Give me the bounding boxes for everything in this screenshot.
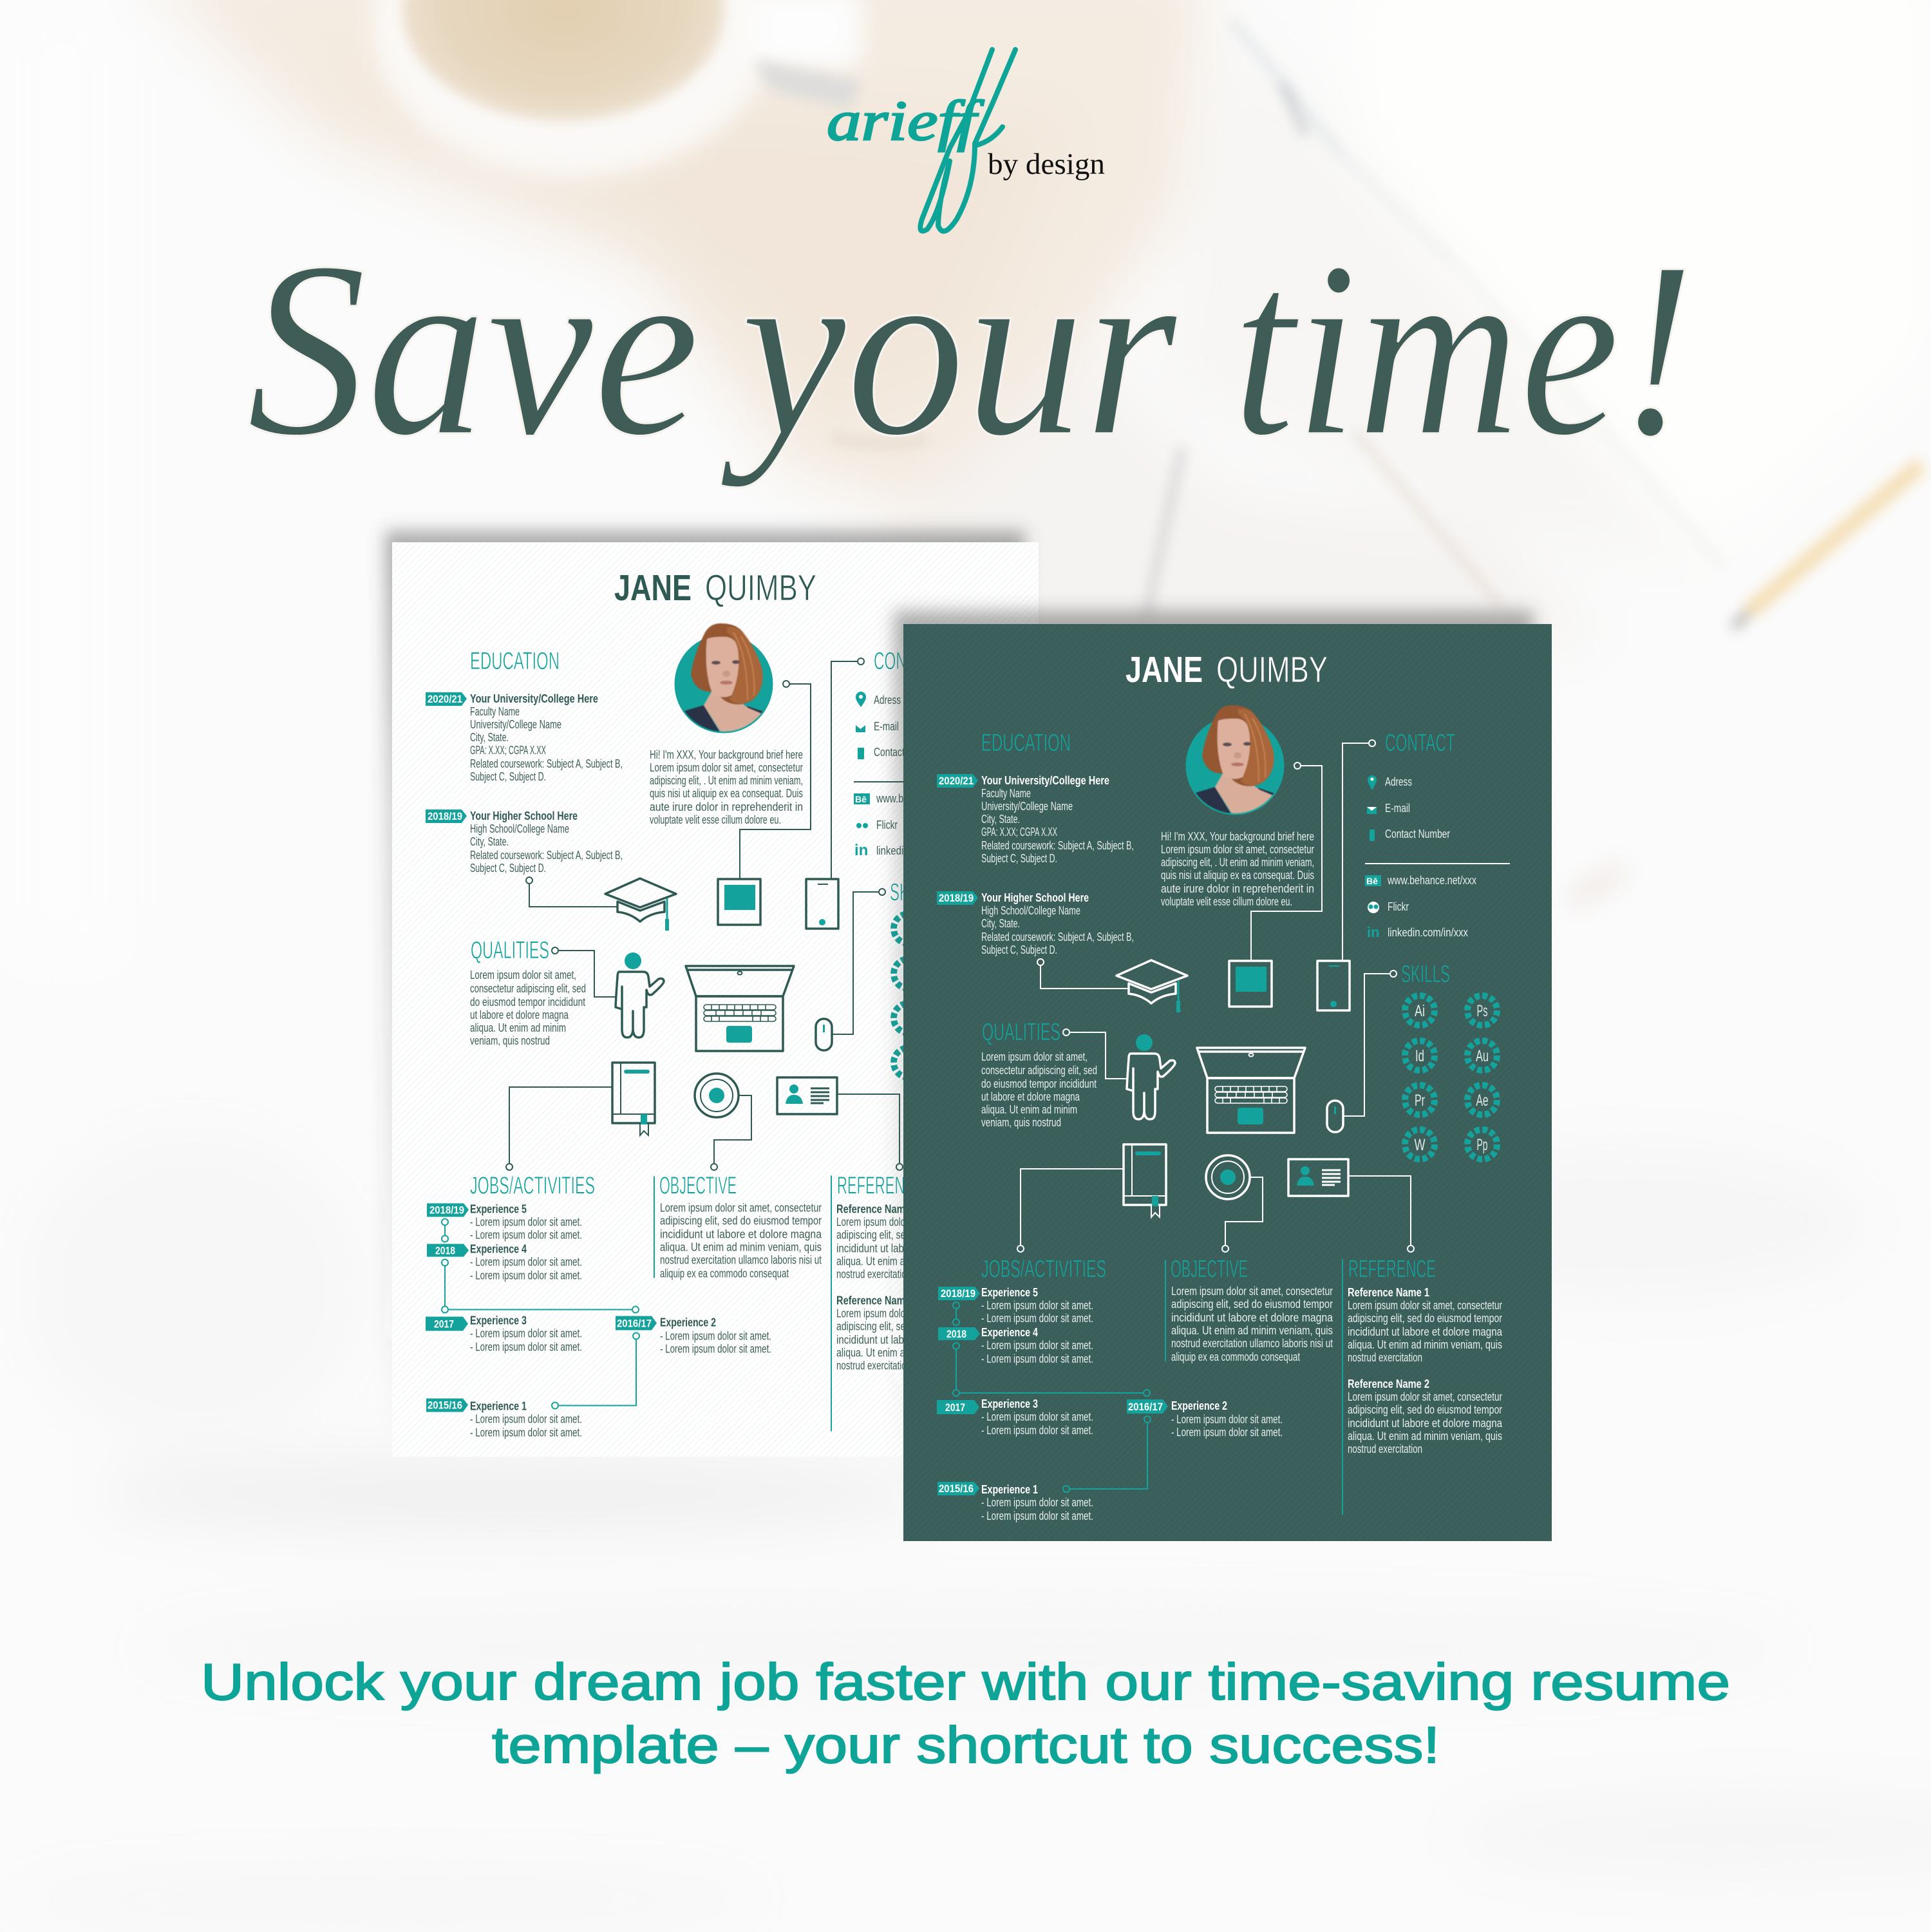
reference section: incididunt ut labore et dolore magna	[836, 1333, 992, 1346]
skills section: Ps	[1477, 1002, 1487, 1020]
logo script wordmark: arieff	[827, 90, 984, 153]
reference section: Reference Name 2	[836, 1294, 918, 1307]
objective section: Lorem ipsum dolor sit amet, consectetur	[1171, 1285, 1333, 1298]
contact section: CONTACT	[1385, 730, 1455, 757]
icon: id card	[1288, 1159, 1414, 1252]
jobs and activities timeline: - Lorem ipsum dolor sit amet.	[470, 1269, 582, 1282]
reference section: REFERENCE	[837, 1172, 925, 1199]
icon: tablet	[1229, 961, 1272, 1007]
jobs and activities timeline: Experience 2	[660, 1316, 716, 1329]
contact section: Flickr	[1388, 900, 1409, 913]
qualities section: QUALITIES	[982, 1019, 1060, 1046]
education section	[937, 730, 1134, 956]
qualities section: aliqua. Ut enim ad minim	[981, 1103, 1077, 1116]
name heading: JANE	[1126, 649, 1203, 690]
reference section: nostrud exercitation	[836, 1359, 911, 1372]
jobs and activities timeline: - Lorem ipsum dolor sit amet.	[981, 1352, 1093, 1365]
jobs and activities timeline: Experience 5	[981, 1286, 1038, 1299]
tagline caption	[201, 1653, 1730, 1774]
objective section: OBJECTIVE	[659, 1172, 737, 1199]
bio text: aute irure dolor in reprehenderit in	[1161, 882, 1314, 895]
education section: 2018/19	[428, 810, 462, 822]
reference section: incididunt ut labore et dolore magna	[1348, 1325, 1503, 1338]
jobs and activities timeline: - Lorem ipsum dolor sit amet.	[981, 1496, 1093, 1509]
qualities section: QUALITIES	[471, 937, 549, 964]
icon: mouse	[816, 889, 885, 1050]
education section: Faculty Name	[981, 787, 1031, 800]
icon: target	[695, 1074, 751, 1170]
contact section: Adress	[874, 694, 901, 706]
icon: mouse	[1327, 971, 1397, 1132]
reference section: Reference Name 1	[1348, 1286, 1429, 1299]
education section: Related coursework: Subject A, Subject B,	[470, 849, 623, 862]
icon: book	[1017, 1144, 1166, 1252]
jobs and activities timeline: - Lorem ipsum dolor sit amet.	[470, 1256, 582, 1269]
reference section	[831, 1172, 992, 1431]
bio text: quis nisi ut aliquip ex ea consequat. Duis	[1161, 869, 1314, 882]
objective section: adipiscing elit, sed do eiusmod tempor	[1171, 1298, 1333, 1311]
tagline caption: template – your shortcut to success!	[492, 1716, 1440, 1774]
qualities section: do eiusmod tempor incididunt	[470, 996, 585, 1009]
education section: 2020/21	[939, 775, 974, 787]
education section: Subject C, Subject D.	[981, 852, 1057, 865]
icon: phone	[806, 879, 838, 929]
jobs and activities timeline: Experience 1	[981, 1483, 1038, 1496]
bio text: quis nisi ut aliquip ex ea consequat. Duis	[650, 787, 803, 800]
name heading	[1126, 649, 1328, 690]
light panel background	[392, 542, 1039, 1457]
education section: Your Higher School Here	[470, 810, 578, 822]
icon: person presenting	[1127, 1034, 1175, 1119]
education section: EDUCATION	[470, 648, 560, 675]
education section: Related coursework: Subject A, Subject B,	[981, 931, 1134, 943]
icon: phone	[1317, 961, 1350, 1010]
reference section: incididunt ut labore et dolore magna	[836, 1242, 992, 1255]
icon: target	[1206, 1155, 1263, 1252]
jobs and activities timeline: - Lorem ipsum dolor sit amet.	[660, 1329, 771, 1342]
jobs and activities timeline: Experience 2	[1171, 1399, 1227, 1412]
education section: Related coursework: Subject A, Subject B,	[981, 839, 1134, 852]
objective section: aliqua. Ut enim ad minim veniam, quis	[660, 1240, 822, 1253]
reference section: aliqua. Ut enim ad minim veniam, quis	[1348, 1338, 1502, 1351]
jobs and activities timeline: JOBS/ACTIVITIES	[470, 1172, 595, 1199]
reference section: REFERENCE	[1348, 1256, 1436, 1283]
title: your	[718, 210, 1181, 488]
objective section: aliquip ex ea commodo consequat	[660, 1267, 789, 1280]
education section: 2018/19	[939, 892, 974, 904]
skills section: W	[1414, 1136, 1426, 1154]
skills section: Id	[1415, 1047, 1424, 1065]
jobs and activities timeline: - Lorem ipsum dolor sit amet.	[1171, 1413, 1283, 1426]
jobs and activities timeline: Experience 4	[981, 1326, 1038, 1339]
jobs and activities timeline: Experience 1	[470, 1400, 527, 1413]
jobs and activities timeline: 2017	[434, 1318, 454, 1331]
objective section: aliqua. Ut enim ad minim veniam, quis	[1171, 1324, 1333, 1337]
education section: High School/College Name	[470, 822, 569, 835]
jobs and activities timeline: JOBS/ACTIVITIES	[981, 1256, 1106, 1283]
objective section: nostrud exercitation ullamco laboris nisi ut	[660, 1253, 822, 1266]
reference section: nostrud exercitation	[1348, 1443, 1422, 1455]
education section: University/College Name	[470, 718, 561, 731]
skills section	[890, 879, 939, 1077]
reference section: aliqua. Ut enim ad minim veniam, quis	[836, 1255, 991, 1267]
objective section: incididunt ut labore et dolore magna	[1171, 1311, 1333, 1324]
qualities section: aliqua. Ut enim ad minim	[470, 1021, 566, 1034]
jobs and activities timeline: - Lorem ipsum dolor sit amet.	[660, 1342, 771, 1355]
objective section: incididunt ut labore et dolore magna	[660, 1227, 822, 1240]
qualities section: Lorem ipsum dolor sit amet,	[981, 1050, 1088, 1063]
qualities section: Lorem ipsum dolor sit amet,	[470, 969, 576, 981]
bio text: aute irure dolor in reprehenderit in	[650, 800, 803, 813]
contact section: E-mail	[874, 720, 899, 733]
portrait photo	[1186, 705, 1284, 824]
objective section: OBJECTIVE	[1171, 1256, 1248, 1283]
jobs and activities timeline: Experience 5	[470, 1203, 527, 1216]
qualities section: do eiusmod tempor incididunt	[981, 1077, 1097, 1090]
bio text: adipiscing elit, . Ut enim ad minim veniam,	[1161, 856, 1314, 869]
jobs and activities timeline: Experience 3	[981, 1397, 1038, 1410]
skills section: Pr	[1415, 1092, 1425, 1110]
reference section: aliqua. Ut enim ad minim veniam, quis	[1348, 1430, 1502, 1443]
reference section: adipiscing elit, sed do eiusmod tempor	[1348, 1312, 1502, 1325]
education section	[426, 648, 623, 875]
contact section: Adress	[1385, 775, 1412, 788]
qualities section: ut labore et dolore magna	[470, 1009, 569, 1021]
contact section: Bē	[855, 794, 867, 804]
jobs and activities timeline: 2018/19	[429, 1204, 464, 1216]
reference section: Reference Name 1	[836, 1203, 918, 1216]
objective section: adipiscing elit, sed do eiusmod tempor	[660, 1215, 822, 1227]
qualities section: consectetur adipiscing elit, sed	[470, 982, 586, 995]
skills section: Au	[1476, 1047, 1489, 1065]
tagline caption: Unlock your dream job faster with our time-saving resume	[201, 1653, 1730, 1710]
contact section: linkedin.com/in/xxx	[876, 844, 957, 857]
education section: EDUCATION	[981, 730, 1071, 757]
title	[247, 210, 1695, 488]
contact section: in	[854, 842, 868, 859]
jobs and activities timeline: - Lorem ipsum dolor sit amet.	[470, 1327, 582, 1340]
jobs and activities timeline	[426, 1172, 771, 1439]
contact section: Bē	[1366, 876, 1378, 886]
objective section: aliquip ex ea commodo consequat	[1171, 1350, 1300, 1363]
jobs and activities timeline: 2018/19	[941, 1287, 975, 1300]
bio text	[1161, 830, 1314, 908]
bio text: voluptate velit esse cillum dolore eu.	[1161, 895, 1292, 908]
jobs and activities timeline: - Lorem ipsum dolor sit amet.	[470, 1413, 582, 1426]
portrait photo	[675, 623, 773, 742]
qualities section	[981, 1019, 1127, 1129]
bio text: Lorem ipsum dolor sit amet, consectetur	[1161, 843, 1314, 856]
jobs and activities timeline: 2015/16	[428, 1399, 462, 1412]
qualities section	[470, 937, 616, 1047]
jobs and activities timeline: 2017	[945, 1401, 965, 1414]
name heading: QUIMBY	[1216, 649, 1328, 690]
education section: City, State.	[470, 731, 509, 744]
skills section: SKILLS	[1401, 961, 1450, 988]
objective section	[654, 1172, 822, 1280]
dark panel background	[903, 624, 1552, 1541]
jobs and activities timeline: - Lorem ipsum dolor sit amet.	[981, 1410, 1093, 1423]
education section: City, State.	[981, 813, 1020, 826]
icon: id card	[777, 1077, 903, 1170]
objective section	[1165, 1256, 1333, 1363]
education section: City, State.	[981, 917, 1020, 930]
skills section: Ai	[1415, 1002, 1425, 1020]
logo swash strokes	[920, 50, 1015, 231]
contact section: linkedin.com/in/xxx	[1388, 926, 1468, 939]
education section: 2020/21	[428, 693, 462, 705]
education section: Faculty Name	[470, 705, 520, 718]
jobs and activities timeline: 2015/16	[939, 1482, 974, 1495]
bio text: voluptate velit esse cillum dolore eu.	[650, 813, 781, 826]
reference section	[1342, 1256, 1503, 1515]
qualities section: ut labore et dolore magna	[981, 1090, 1080, 1103]
icon: graduation cap	[526, 877, 676, 931]
jobs and activities timeline: 2016/17	[617, 1318, 652, 1329]
logo tagline: by design	[988, 147, 1105, 181]
jobs and activities timeline: - Lorem ipsum dolor sit amet.	[981, 1424, 1093, 1437]
icon: laptop	[686, 966, 794, 1051]
icon: book	[506, 1063, 655, 1170]
jobs and activities timeline: 2018	[947, 1328, 966, 1340]
icon: laptop	[1197, 1048, 1305, 1133]
jobs and activities timeline: - Lorem ipsum dolor sit amet.	[470, 1341, 582, 1354]
shadow: light resume	[385, 531, 1025, 1445]
qualities section: consectetur adipiscing elit, sed	[981, 1064, 1097, 1077]
jobs and activities timeline: - Lorem ipsum dolor sit amet.	[1171, 1426, 1283, 1439]
icon: tablet	[718, 879, 760, 925]
jobs and activities timeline: - Lorem ipsum dolor sit amet.	[981, 1339, 1093, 1352]
jobs and activities timeline	[937, 1256, 1283, 1522]
bio text	[650, 748, 803, 826]
jobs and activities timeline: Experience 4	[470, 1243, 527, 1256]
reference section: aliqua. Ut enim ad minim veniam, quis	[836, 1346, 991, 1359]
connector: bio to tablet	[740, 681, 811, 878]
reference section: adipiscing elit, sed do eiusmod tempor	[1348, 1403, 1502, 1416]
jobs and activities timeline: - Lorem ipsum dolor sit amet.	[981, 1312, 1093, 1325]
bio text: Hi! I'm XXX, Your background brief here	[650, 748, 803, 761]
education section: Your University/College Here	[470, 692, 598, 705]
jobs and activities timeline: Experience 3	[470, 1314, 527, 1327]
name heading: JANE	[614, 567, 692, 609]
title: Save	[247, 210, 700, 488]
education section: Subject C, Subject D.	[981, 943, 1057, 956]
education section: High School/College Name	[981, 904, 1080, 917]
logo: arieff by design	[827, 50, 1105, 231]
reference section: incididunt ut labore et dolore magna	[1348, 1417, 1503, 1430]
skills section: Pp	[1477, 1136, 1487, 1154]
icon: graduation cap	[1037, 959, 1187, 1012]
education section: GPA: X.XX; CGPA X.XX	[981, 826, 1057, 838]
contact section	[831, 648, 999, 878]
education section: Related coursework: Subject A, Subject B,	[470, 757, 623, 770]
reference section: nostrud exercitation	[1348, 1351, 1422, 1364]
shadow: dark resume	[894, 611, 1534, 1486]
education section: Your University/College Here	[981, 774, 1109, 787]
contact section: www.behance.net/xxx	[876, 792, 965, 805]
connector: bio to tablet	[1251, 762, 1322, 960]
reference section: Lorem ipsum dolor sit amet, consectetur	[1348, 1299, 1502, 1312]
reference section: adipiscing elit, sed do eiusmod tempor	[836, 1320, 991, 1333]
education section: GPA: X.XX; CGPA X.XX	[470, 744, 546, 757]
reference section: Reference Name 2	[1348, 1378, 1429, 1390]
jobs and activities timeline: - Lorem ipsum dolor sit amet.	[470, 1229, 582, 1242]
contact section: www.behance.net/xxx	[1387, 874, 1476, 887]
name heading	[614, 567, 816, 609]
education section: Your Higher School Here	[981, 891, 1089, 904]
education section: City, State.	[470, 835, 509, 848]
objective section: Lorem ipsum dolor sit amet, consectetur	[660, 1202, 822, 1215]
contact section: in	[1367, 924, 1380, 940]
qualities section: veniam, quis nostrud	[470, 1034, 550, 1047]
bio text: Hi! I'm XXX, Your background brief here	[1161, 830, 1314, 843]
bio text: adipiscing elit, . Ut enim ad minim veniam,	[650, 774, 803, 787]
contact section: CONTACT	[874, 648, 944, 675]
jobs and activities timeline: 2018	[435, 1244, 455, 1257]
education section: Subject C, Subject D.	[470, 862, 546, 875]
contact section	[1342, 730, 1510, 960]
contact section: Flickr	[876, 819, 898, 831]
icon: person presenting	[616, 952, 664, 1037]
panel: dark resume	[903, 624, 1552, 1541]
qualities section: veniam, quis nostrud	[981, 1116, 1061, 1129]
skills section: Ae	[1476, 1092, 1489, 1110]
contact section: E-mail	[1385, 802, 1410, 815]
reference section: Lorem ipsum dolor sit amet, consectetur	[836, 1307, 991, 1320]
skills section	[1401, 961, 1497, 1159]
reference section: Lorem ipsum dolor sit amet, consectetur	[1348, 1390, 1502, 1403]
education section: University/College Name	[981, 800, 1073, 813]
reference section: nostrud exercitation	[836, 1267, 911, 1280]
bio text: Lorem ipsum dolor sit amet, consectetur	[650, 761, 803, 774]
panel: light resume	[392, 542, 1039, 1457]
education section: Subject C, Subject D.	[470, 770, 546, 783]
jobs and activities timeline: - Lorem ipsum dolor sit amet.	[470, 1426, 582, 1439]
reference section: adipiscing elit, sed do eiusmod tempor	[836, 1229, 991, 1242]
contact section: Contact Number	[874, 746, 939, 759]
jobs and activities timeline: - Lorem ipsum dolor sit amet.	[470, 1216, 582, 1229]
jobs and activities timeline: - Lorem ipsum dolor sit amet.	[981, 1299, 1093, 1312]
jobs and activities timeline: 2016/17	[1128, 1401, 1163, 1413]
skills section: SKILLS	[890, 879, 939, 906]
objective section: nostrud exercitation ullamco laboris nisi ut	[1171, 1337, 1333, 1350]
contact section: Contact Number	[1385, 828, 1450, 840]
title: time!	[1232, 210, 1695, 488]
name heading: QUIMBY	[705, 567, 816, 609]
jobs and activities timeline: - Lorem ipsum dolor sit amet.	[981, 1510, 1093, 1522]
reference section: Lorem ipsum dolor sit amet, consectetur	[836, 1216, 991, 1229]
